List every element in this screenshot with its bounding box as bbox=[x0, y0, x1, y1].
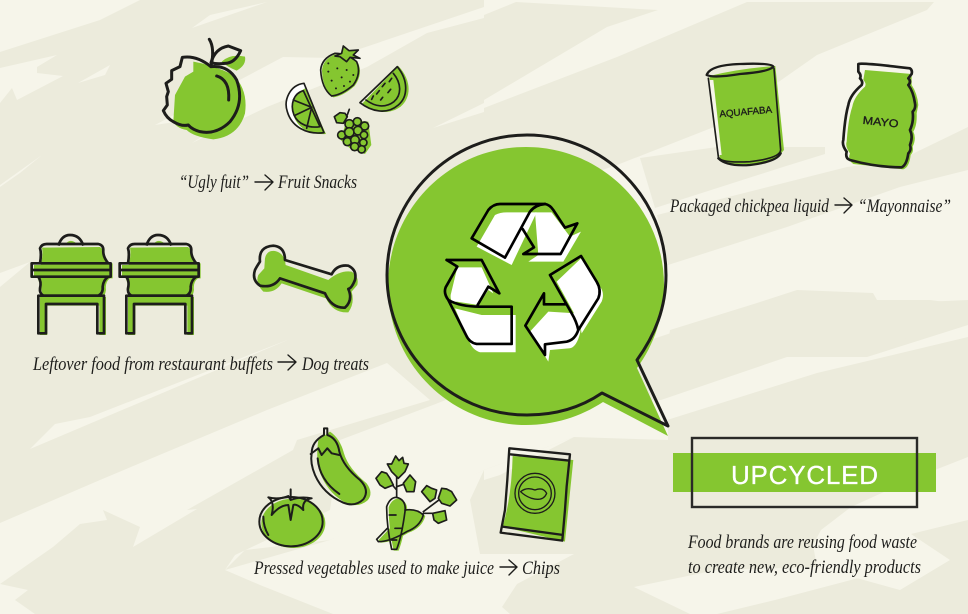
aquafaba can bbox=[707, 64, 784, 165]
caption: vegetables: Chips bbox=[522, 558, 560, 579]
arrow bbox=[278, 355, 296, 370]
mayo jar bbox=[843, 64, 918, 169]
apple icon bbox=[163, 39, 246, 139]
description text: to create new, eco-friendly products bbox=[688, 557, 921, 578]
banner green bar bbox=[673, 453, 936, 492]
recycling symbol bbox=[445, 204, 603, 362]
arrow bbox=[255, 175, 273, 190]
caption: chickpea: Packaged chickpea liquid bbox=[669, 196, 829, 217]
eggplant icon bbox=[311, 428, 370, 505]
dog bone icon bbox=[254, 246, 358, 312]
fruit: lime wedge bbox=[286, 83, 326, 134]
jar label: MAYO bbox=[862, 115, 900, 131]
speech bubble with recycling symbol bbox=[387, 135, 668, 436]
caption: ugly fruit bbox=[179, 172, 357, 193]
fruit: grapes bbox=[334, 109, 371, 154]
darker patch behind lower right bbox=[661, 290, 968, 395]
bubble green fill bbox=[388, 147, 668, 436]
caption: buffets: Leftover food from restaurant buffets bbox=[32, 354, 273, 375]
caption: ugly fruit: “Ugly fuit” bbox=[179, 172, 249, 193]
chafing dish 1 bbox=[32, 235, 113, 335]
chafing dish 2 bbox=[120, 235, 201, 335]
fruit: melon slice bbox=[360, 66, 409, 112]
upcycled banner bbox=[673, 438, 936, 507]
arrow bbox=[835, 198, 852, 213]
bubble outline bbox=[387, 135, 668, 426]
chip bag icon bbox=[501, 448, 573, 542]
arrow bbox=[500, 560, 517, 575]
caption: ugly fruit: Fruit Snacks bbox=[277, 172, 357, 193]
can label: AQUAFABA bbox=[719, 105, 773, 120]
caption: vegetables: Pressed vegetables used to make juice bbox=[253, 558, 494, 579]
description text: Food brands are reusing food waste bbox=[687, 532, 917, 553]
banner frame bbox=[692, 438, 917, 507]
carrots icon bbox=[376, 456, 457, 551]
banner title: UPCYCLED bbox=[731, 460, 878, 490]
description text bbox=[687, 532, 921, 578]
tomato icon bbox=[259, 489, 325, 548]
fruit: strawberry bbox=[321, 46, 360, 97]
caption: buffets: Dog treats bbox=[301, 354, 369, 375]
caption: chickpea bbox=[669, 196, 951, 217]
